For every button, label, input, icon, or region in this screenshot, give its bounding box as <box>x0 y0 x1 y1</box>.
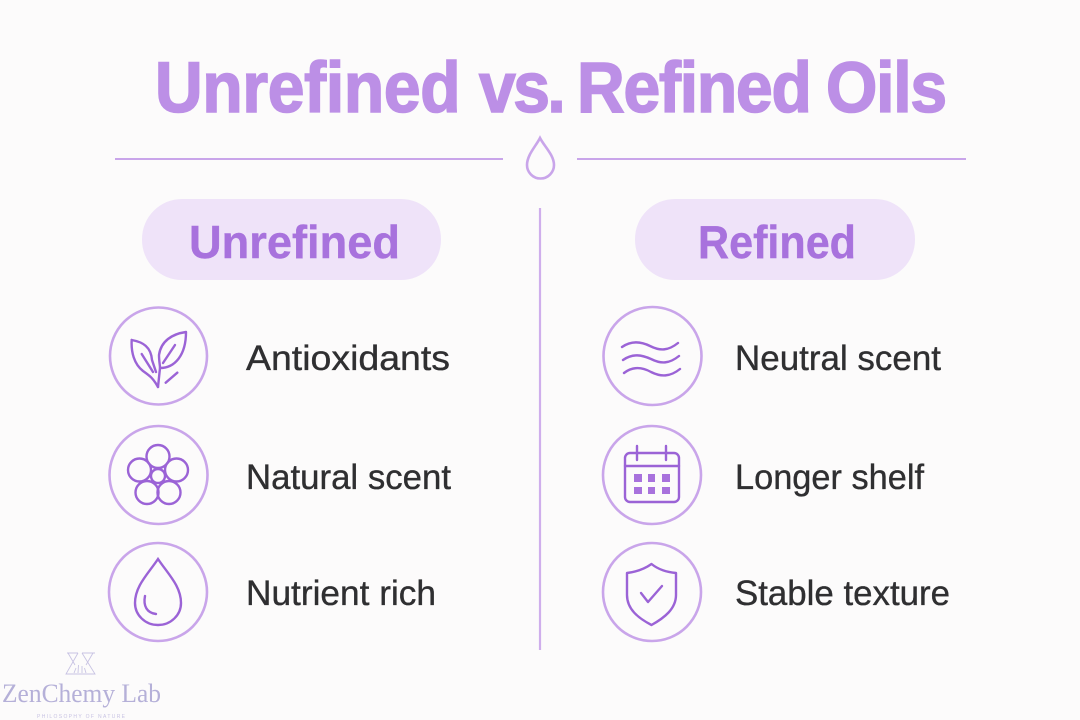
title divider with drop <box>115 138 966 178</box>
icon: shield <box>603 543 701 641</box>
title: vs. <box>479 48 563 128</box>
label: antioxidants: Antioxidants <box>246 339 450 378</box>
item: antioxidants <box>110 308 450 404</box>
panel: refined <box>603 199 950 641</box>
icon: drop <box>109 543 207 641</box>
heading pill: refined: Refined <box>698 216 856 268</box>
heading pill: refined <box>635 199 915 280</box>
title: Oils <box>826 48 946 128</box>
icon: logo mark <box>66 653 95 674</box>
wordmark: ZenChemy Lab <box>2 679 161 708</box>
label: natural scent: Natural scent <box>246 458 451 497</box>
item: nutrient rich <box>109 543 436 641</box>
item: natural scent <box>110 426 451 524</box>
icon: calendar <box>603 426 701 524</box>
title: Unrefined <box>155 48 460 128</box>
panel: unrefined <box>109 199 451 641</box>
item: neutral scent <box>604 307 941 405</box>
icon: leaves <box>110 308 207 404</box>
heading pill: unrefined: Unrefined <box>189 216 400 268</box>
item: stable texture <box>603 543 950 641</box>
item: longer shelf <box>603 426 924 524</box>
label: neutral scent: Neutral scent <box>735 339 941 378</box>
title: Refined <box>577 48 811 128</box>
tagline: PHILOSOPHY OF NATURE <box>37 714 126 720</box>
label: stable texture: Stable texture <box>735 574 950 613</box>
label: longer shelf: Longer shelf <box>735 458 924 497</box>
logo: ZenChemy Lab <box>2 653 161 720</box>
heading pill: unrefined <box>142 199 441 280</box>
label: nutrient rich: Nutrient rich <box>246 574 436 613</box>
icon: waves <box>604 307 702 405</box>
icon: flower <box>110 426 208 524</box>
